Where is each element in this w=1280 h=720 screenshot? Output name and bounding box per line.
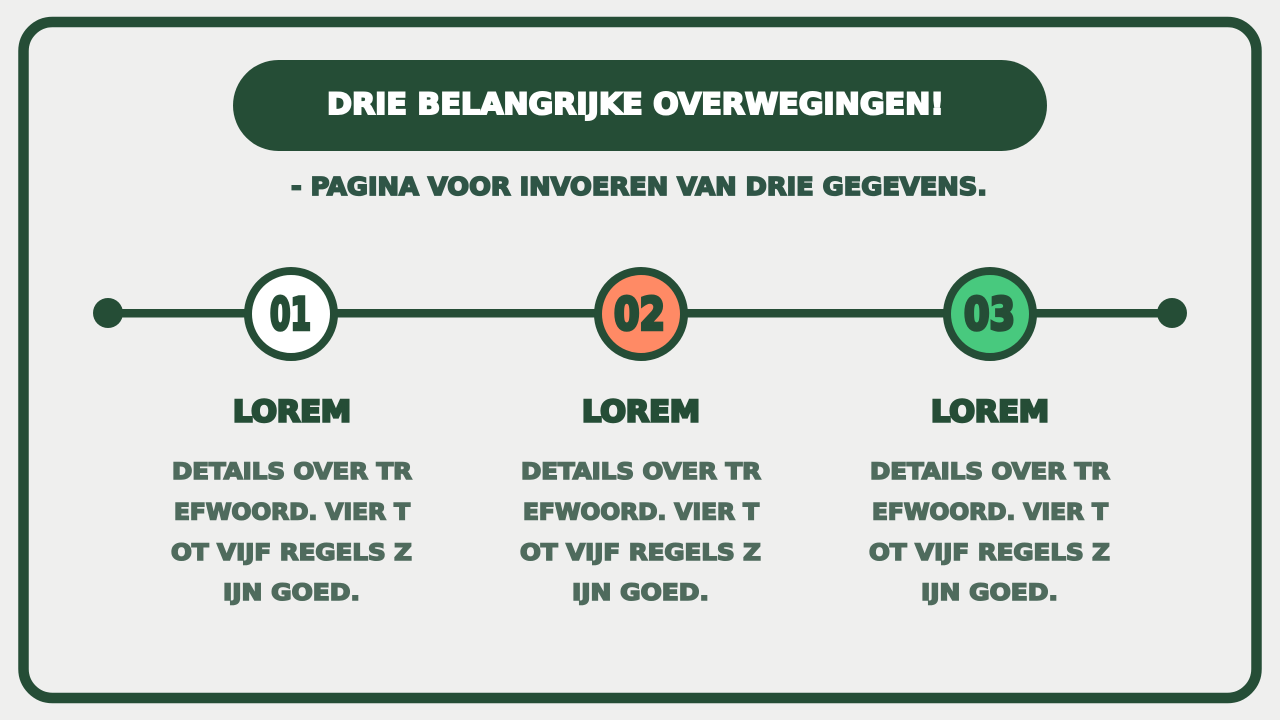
column 2 heading: LOREM — [582, 395, 700, 429]
column 3 details: DETAILS OVER TR — [870, 459, 1110, 485]
column 3 details: OT VIJF REGELS Z — [869, 540, 1110, 566]
column 3 — [869, 395, 1110, 606]
column 2 details: EFWOORD. VIER T — [523, 500, 760, 526]
title banner: DRIE BELANGRIJKE OVERWEGINGEN! — [327, 87, 944, 121]
column 2 details — [520, 459, 761, 606]
column 2 details: OT VIJF REGELS Z — [520, 540, 761, 566]
column 1 details: EFWOORD. VIER T — [174, 500, 411, 526]
timeline line — [108, 309, 1172, 318]
column 3 details — [869, 459, 1110, 606]
timeline end dot — [1157, 298, 1187, 328]
column 1 — [171, 395, 412, 606]
column 1 details: OT VIJF REGELS Z — [171, 540, 412, 566]
column 1 heading: LOREM — [233, 395, 351, 429]
timeline start dot — [93, 298, 123, 328]
column 2 details: DETAILS OVER TR — [521, 459, 761, 485]
column 2 details: IJN GOED. — [572, 580, 709, 606]
timeline — [93, 271, 1187, 357]
column 3 heading: LOREM — [931, 395, 1049, 429]
column 3 details: EFWOORD. VIER T — [872, 500, 1109, 526]
subtitle: - PAGINA VOOR INVOEREN VAN DRIE GEGEVENS. — [291, 172, 987, 201]
step marker 01: 01 — [270, 288, 311, 340]
column 2 — [520, 395, 761, 606]
step marker 03: 03 — [964, 288, 1015, 340]
step marker 03 — [947, 271, 1033, 357]
title banner — [233, 60, 1047, 151]
column 1 details: IJN GOED. — [223, 580, 360, 606]
step marker 01 — [248, 271, 334, 357]
step marker 02: 02 — [614, 288, 665, 340]
column 1 details — [171, 459, 412, 606]
step marker 02 — [598, 271, 684, 357]
column 1 details: DETAILS OVER TR — [172, 459, 412, 485]
column 3 details: IJN GOED. — [921, 580, 1058, 606]
